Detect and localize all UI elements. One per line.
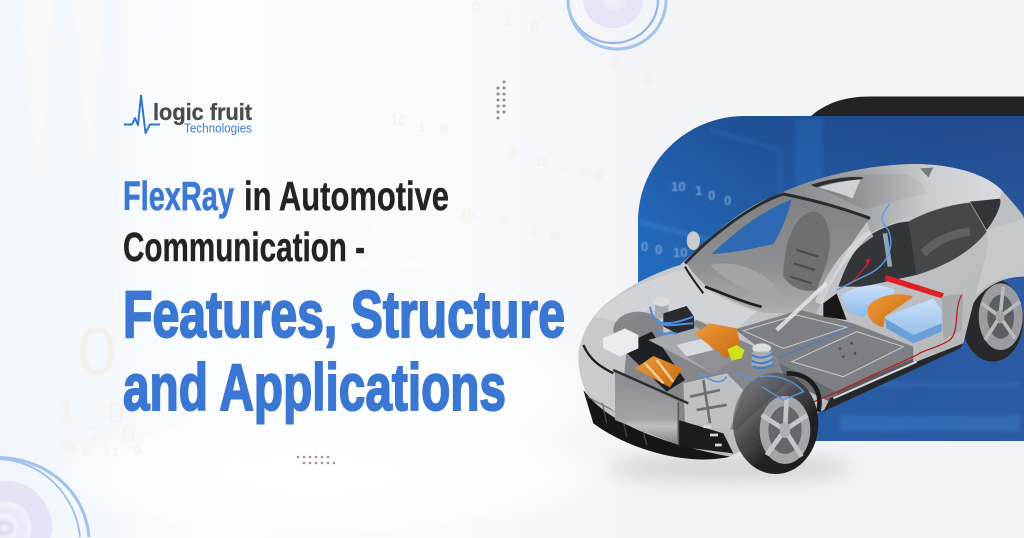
seats [710,212,830,307]
shock tower left [650,297,694,333]
windshield view of panel [712,199,792,254]
rear suspension [942,293,963,340]
front wheel [733,373,818,474]
panel binary digits: 10 [671,179,685,194]
rear black gap [823,293,847,320]
faint binary digits: 1 [500,213,507,228]
faint binary digits: 1 [88,423,99,445]
wheel seen through hood [613,312,663,348]
rear wheel [962,278,1023,362]
panel binary digits: 10 [673,245,687,260]
faint binary digits: 0 [108,397,125,430]
hood highlight [593,270,757,328]
faint code lines: True [372,223,394,235]
side sill [823,343,963,412]
faint binary digits: 10 [460,208,474,223]
faint binary digits: 10 [390,112,407,129]
faint code lines: = False [420,289,456,301]
faint binary digits: 1 [103,443,110,458]
heading: in Automotive [244,173,449,219]
faint binary digits: 0 [82,443,89,458]
rear orange inverter [868,294,913,327]
logo wordmark: logic fruit [153,99,252,125]
faint binary digits: 0 [596,168,603,183]
panel light streaks [640,118,1020,431]
front bumper [578,347,615,412]
faint binary digits: 0 [530,223,537,238]
faint binary digits: 0 [134,442,141,457]
wipers [705,287,762,307]
grille and lower lip [583,390,733,459]
heading [123,173,565,424]
rear side window [908,203,987,275]
faint binary digits: 10 [535,154,549,169]
rear motor blue housings [842,285,942,343]
logo [124,96,252,136]
B pillar strut [885,233,890,267]
shark fin [920,167,933,177]
faint binary digits: 1 [503,11,512,30]
windshield [687,194,870,314]
panel binary digits: 1 [695,183,702,198]
orange front motor [695,323,740,358]
yellow box [727,345,745,361]
heading line 4: and Applications [123,350,506,424]
front wheel arch [787,373,819,412]
mirror [687,231,700,250]
panel binary digits: 0 [655,242,662,257]
car illustration [578,164,1024,474]
sunroof [811,174,927,209]
panel binary digits: 0 [724,193,731,208]
dots: horizontal [297,456,335,464]
car body [578,164,1024,457]
faint binary digits: 1 [560,158,567,173]
faint binary digits: 1 [417,119,425,136]
faint binary digits [58,0,653,459]
front component tray [648,327,738,374]
faint binary digits: 0 [510,145,517,160]
faint code lines: = False [390,237,426,249]
faint binary digits: 1 [58,394,75,427]
battery pack floor [735,310,913,405]
front bay [620,320,787,430]
quarter panel light [975,218,1024,297]
faint binary digits: 0 [122,421,135,448]
blue cable [837,203,891,290]
orange lower motor [635,356,683,387]
blue panel [638,116,1024,441]
transparent steering column [777,283,827,330]
faint binary digits: 0 [644,71,653,88]
shock tower right [752,343,773,368]
faint binary digits: 1 [112,444,119,459]
heading line 3: Features, Structure [123,277,565,351]
panel binary digits [641,179,731,260]
logo tagline: Technologies [184,122,252,136]
coolant tank [603,328,638,357]
faint binary digits: 0 [77,314,117,388]
A pillar glass [818,233,872,303]
faint code lines: mirror_x = False [345,259,425,271]
faint code lines: = False [366,271,402,283]
faint binary digits: 0 [580,165,587,180]
panel binary digits: 0 [641,239,648,254]
roof [773,164,1002,233]
faint code lines [345,223,456,301]
faint binary digits: 09 [62,440,76,455]
icon: heartbeat line [124,96,160,133]
faint binary digits: 0 [612,55,621,72]
red cable tube [885,275,944,298]
decorative circle: bottom left [0,458,89,538]
radiator [613,370,678,445]
faint binary digits: 0 [530,18,539,37]
heading line 1: FlexRay [123,173,234,219]
front door frame and cabin [838,222,917,287]
faint binary digits: 0 [550,228,557,243]
black tab behind panel [811,96,1024,116]
faint binary digits: 0 [440,122,448,139]
panel binary digits: 0 [708,188,715,203]
car shadow [610,454,850,482]
decorative circle: top [568,0,666,49]
dots: vertical [496,80,506,120]
heading line 2: Communication - [123,224,365,270]
